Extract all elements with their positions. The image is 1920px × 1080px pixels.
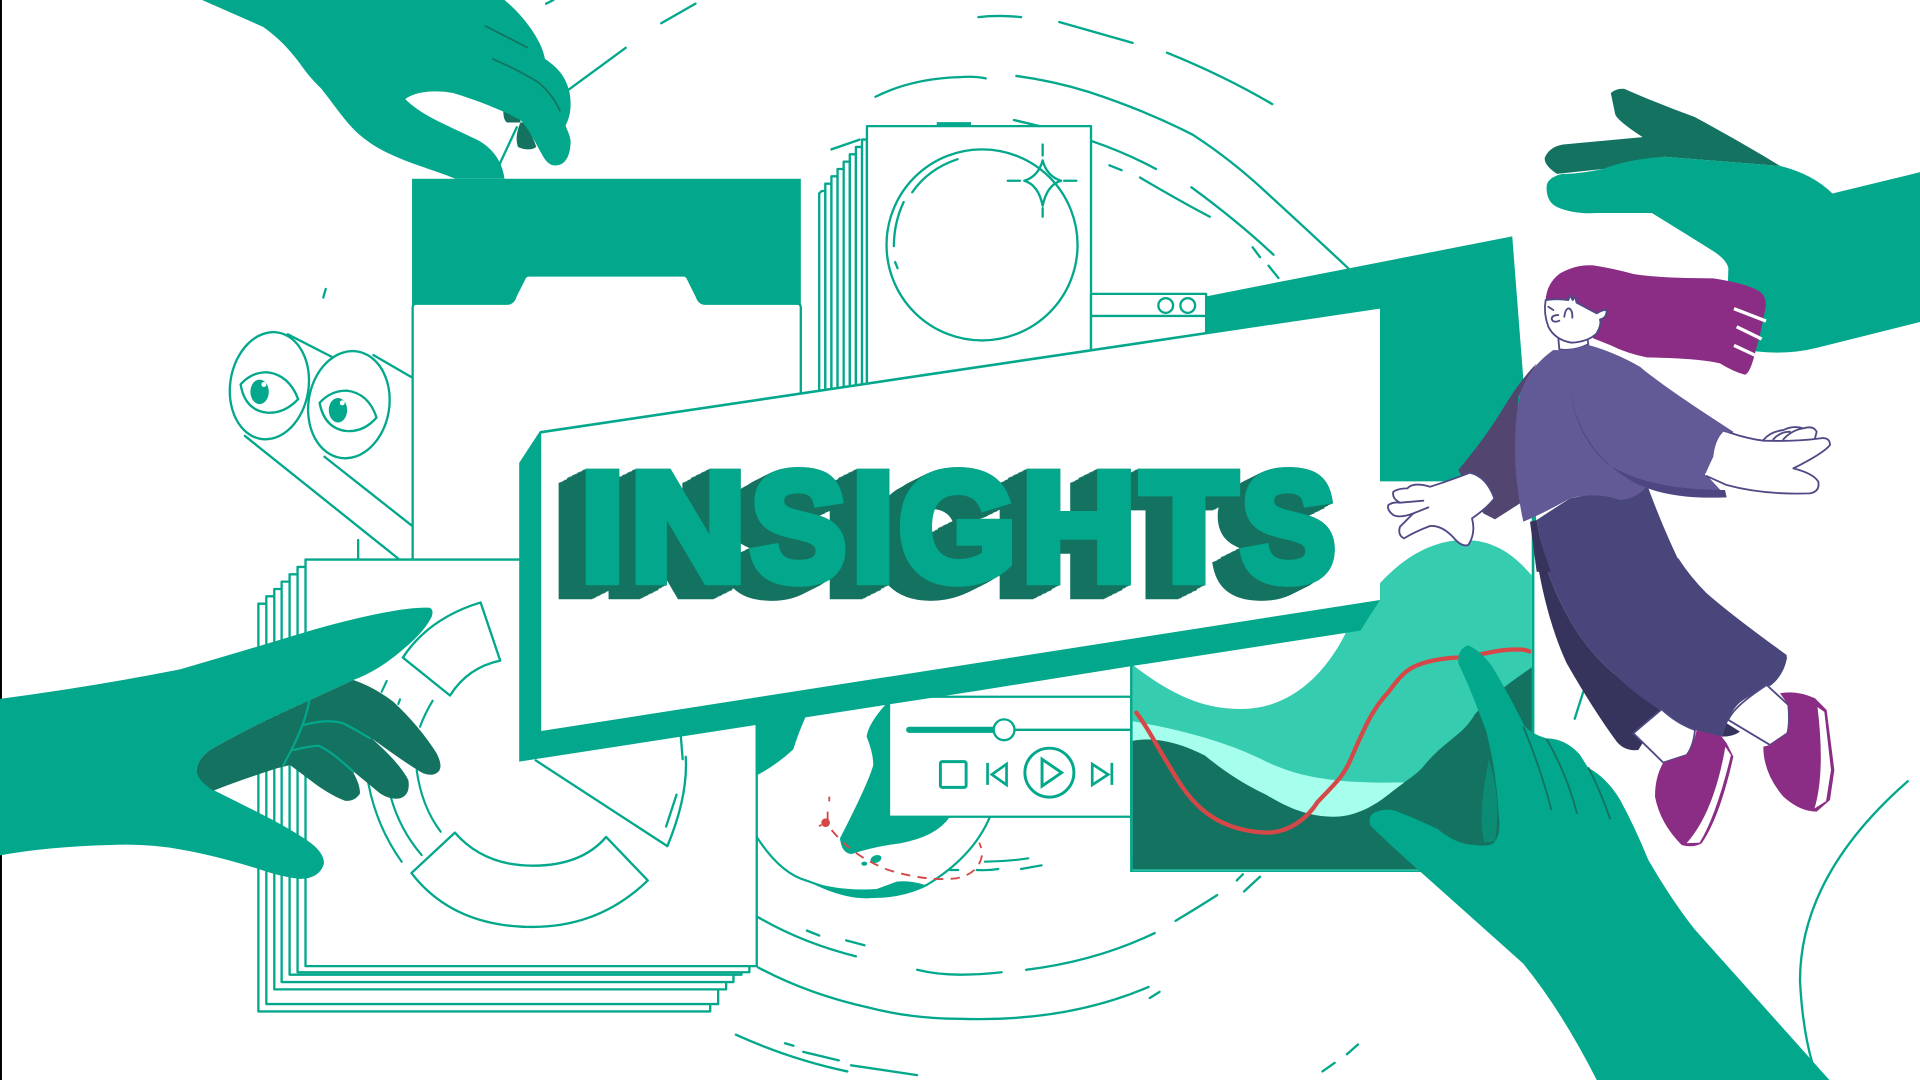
character: woman floating: [1388, 265, 1834, 846]
icon: play: [1025, 748, 1074, 797]
slider: [909, 719, 1131, 740]
icon: right eye: [320, 391, 377, 431]
title: T: [1141, 441, 1237, 613]
icon: stop: [940, 762, 966, 787]
main title banner: [519, 306, 1380, 762]
character left shoe: [1655, 730, 1733, 846]
icon: left eye: [241, 372, 298, 413]
banner back panel: [1206, 236, 1538, 539]
drawer with two dials: [1091, 294, 1206, 367]
eye rollers: [222, 326, 411, 558]
character shoes and socks: [1633, 685, 1834, 846]
radial chart segments: [403, 602, 648, 927]
character neck: [1558, 337, 1588, 350]
circle with inner arcs: [887, 149, 1078, 340]
title: G: [899, 442, 1016, 613]
title: I: [852, 440, 894, 613]
character left hand: [1388, 473, 1494, 545]
top right card stack with circle: [819, 120, 1091, 420]
character hair: [1546, 265, 1766, 375]
character face: [1545, 295, 1607, 343]
front card: [867, 126, 1091, 420]
top right hand: [1545, 89, 1920, 353]
character right shoe: [1763, 692, 1834, 812]
media player panel: [889, 697, 1131, 817]
icon: next: [1092, 763, 1112, 785]
character lower pants: [1537, 558, 1787, 750]
red trend line: [1136, 649, 1529, 833]
title: N: [630, 442, 746, 613]
character upper pants: [1530, 520, 1552, 572]
icon: sparkle: [1008, 144, 1076, 217]
front card: [306, 560, 757, 966]
lower left card stack: [258, 560, 757, 1011]
teal blob with circle and red orbit: [756, 703, 1042, 898]
character shirt: [1458, 345, 1733, 522]
title: I: [580, 441, 625, 614]
finger lines: [283, 700, 370, 772]
character right hand: [1705, 427, 1830, 494]
icon: previous: [988, 763, 1007, 785]
folder: [412, 179, 801, 563]
bottom right hand: [1370, 645, 1829, 1080]
title: [580, 440, 1335, 614]
character left sock: [1633, 709, 1695, 763]
top hand: [202, 0, 571, 179]
dark fingers: [197, 680, 440, 801]
left hand pointing: [0, 608, 440, 879]
title: S: [1241, 442, 1335, 613]
title: S: [751, 440, 846, 613]
radial chart arcs: [368, 681, 441, 862]
area chart: [1131, 480, 1533, 871]
title: H: [1021, 441, 1136, 614]
character upper body: [1388, 265, 1830, 573]
character right sock: [1728, 685, 1789, 745]
